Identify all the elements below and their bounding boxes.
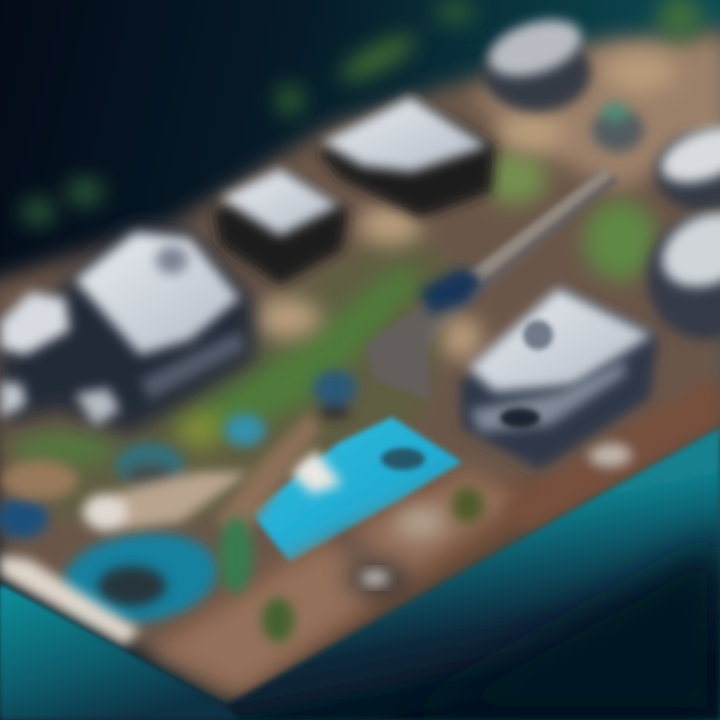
- vehicle: blue car: [420, 268, 482, 314]
- building: top round block: [482, 9, 591, 112]
- beach area with palms and loungers: [150, 470, 520, 695]
- sandy ground highlights: [249, 52, 676, 360]
- building: large right block: [460, 288, 658, 470]
- kiosk: blue pavilion: [313, 370, 357, 419]
- small pools and terrace: [0, 414, 265, 538]
- distant green patches: [22, 0, 702, 225]
- building: centre block: [213, 168, 348, 285]
- building: large left complex: [0, 225, 255, 435]
- swimming pool: lower left: [57, 524, 223, 632]
- swimming pool: large central: [250, 417, 462, 562]
- sandy coast: [0, 412, 320, 645]
- road: [365, 168, 620, 400]
- vegetation: [13, 152, 656, 466]
- right shore: [500, 378, 720, 530]
- building: upper block: [318, 95, 495, 218]
- small building: road kiosk: [592, 103, 644, 152]
- building: right edge pods: [647, 117, 720, 340]
- foreground sea: [0, 428, 720, 720]
